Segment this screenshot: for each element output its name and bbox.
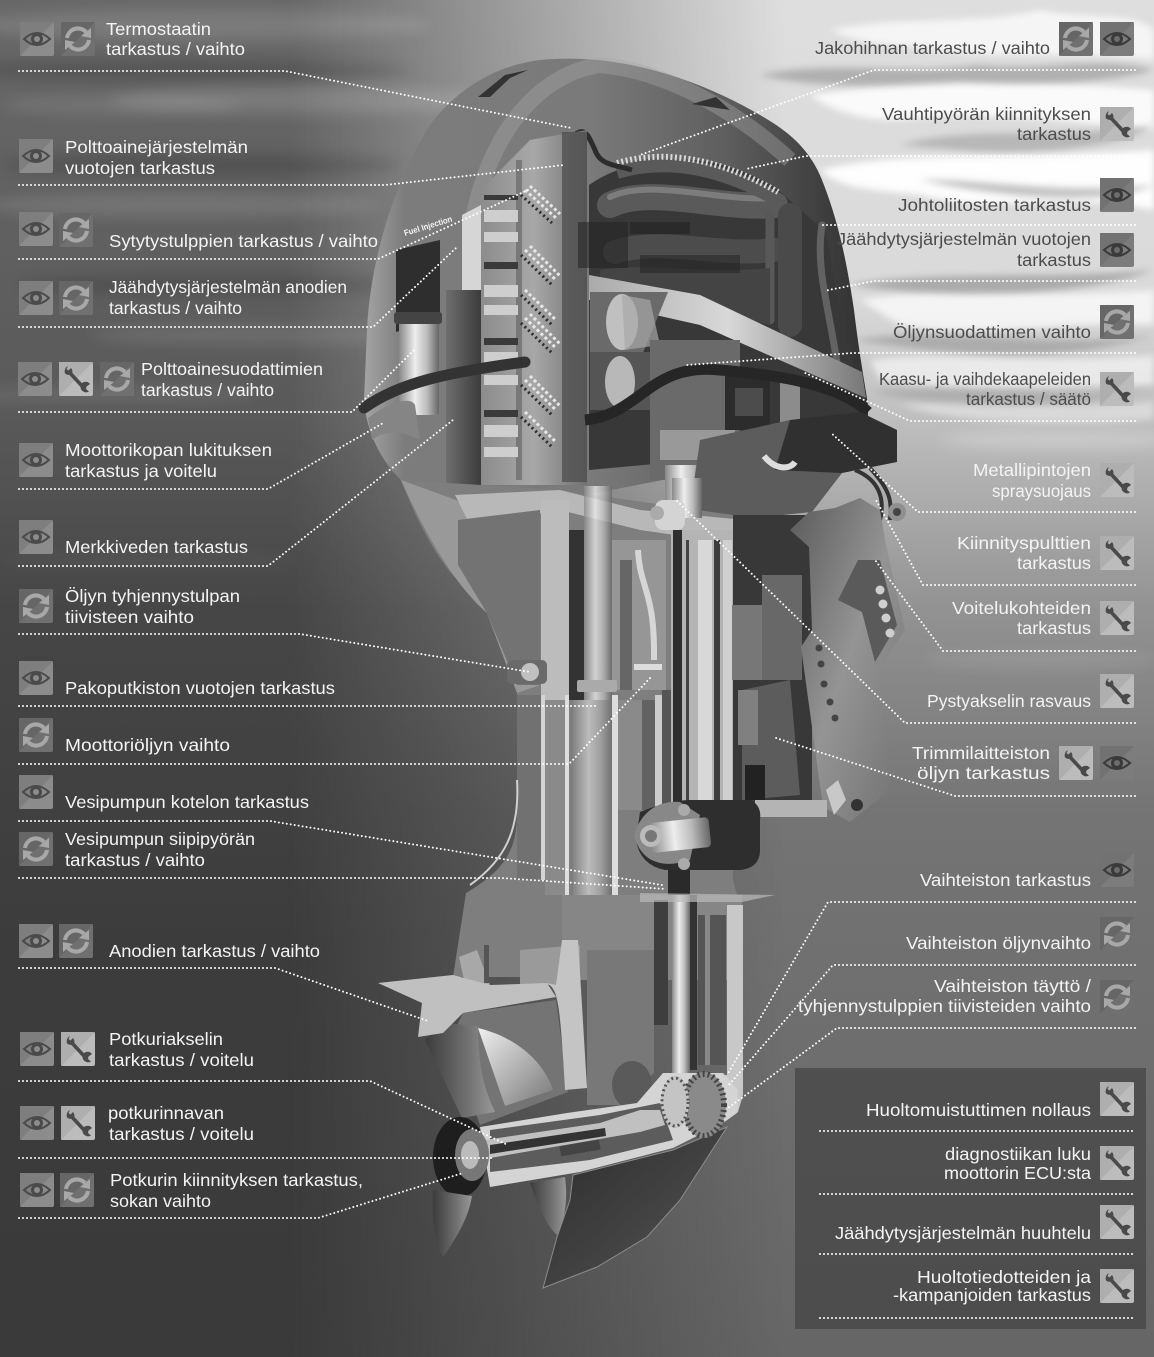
label text: Polttoainesuodattimien — [141, 359, 323, 379]
label text — [882, 104, 1091, 144]
label text: Termostaatin — [106, 19, 211, 39]
leader line — [727, 965, 1135, 1087]
label text — [957, 533, 1091, 573]
icon: refresh — [100, 362, 134, 396]
left item: Anodien — [19, 924, 428, 1021]
exhaust cavity — [612, 1061, 652, 1109]
label text: Anodien tarkastus / vaihto — [109, 941, 320, 961]
leader line — [19, 420, 453, 566]
right item: Jäähdytysjärjestelmän vuotojen — [824, 229, 1135, 291]
label text: Moottorikopan lukituksen — [65, 440, 272, 460]
leader line — [876, 500, 1135, 585]
label text: Potkurin kiinnityksen tarkastus, — [110, 1170, 363, 1190]
prop tunnel area — [450, 1000, 568, 1125]
left item: Sytytystulppien — [19, 190, 528, 259]
icon: wrench — [1100, 1146, 1134, 1180]
icon: wrench — [61, 1032, 95, 1066]
divider line — [820, 1193, 1135, 1195]
leader line — [830, 432, 1135, 512]
lower housing fill — [562, 895, 742, 980]
label text: Trimmilaitteiston — [912, 743, 1050, 763]
leader line — [640, 70, 1135, 155]
label text: Jäähdytysjärjestelmän anodien — [109, 277, 347, 297]
waterline flange — [640, 893, 775, 902]
label text: Metallipintojen — [973, 460, 1091, 480]
leader line — [746, 156, 1135, 169]
intake manifold tubes — [610, 190, 838, 370]
leader line — [19, 71, 571, 128]
icon: eye — [19, 520, 53, 554]
right item: Kaasu- ja vaihdekaapeleiden — [803, 369, 1135, 421]
icon: wrench — [1100, 1205, 1134, 1239]
leader line — [19, 705, 598, 707]
label text: Vesipumpun kotelon tarkastus — [65, 792, 309, 812]
icon: eye — [1100, 178, 1134, 212]
right item: Öljynsuodattimen — [687, 305, 1135, 365]
plate bolt structure — [459, 945, 580, 985]
leader line — [676, 500, 1135, 723]
left item: Merkkiveden — [19, 420, 453, 566]
label text: Pystyakselin rasvaus — [927, 691, 1091, 711]
propeller hub — [433, 1117, 489, 1197]
left cowl panel and fuel filter — [394, 205, 481, 485]
label text: potkurinnavan — [108, 1103, 224, 1123]
label text — [912, 743, 1050, 783]
label text: moottorin ECU:sta — [944, 1163, 1091, 1183]
right item: Trimmilaitteiston — [776, 738, 1135, 796]
icon: eye — [20, 22, 54, 56]
leader line — [19, 677, 651, 764]
icon: eye — [19, 281, 53, 315]
lower black cowl — [775, 412, 897, 473]
label text: tarkastus — [1017, 124, 1091, 144]
label text: Vaihteiston täyttö / — [934, 976, 1091, 996]
label text: tarkastus / säätö — [966, 389, 1091, 409]
label text: Potkuriakselin — [109, 1029, 223, 1049]
label text: tarkastus / voitelu — [109, 1050, 254, 1070]
flywheel ring gear — [617, 157, 778, 200]
label text: Kaasu- ja vaihdekaapeleiden — [879, 369, 1091, 389]
divider line — [820, 1253, 1135, 1255]
icon: eye — [1100, 22, 1134, 56]
label text — [65, 137, 248, 178]
label text: spraysuojaus — [992, 481, 1091, 501]
cam column — [516, 132, 587, 482]
lower left cowl latch — [368, 401, 420, 440]
left item: Jäähdytysjärjestelmän anodien — [19, 248, 456, 327]
pistons — [590, 292, 668, 410]
skeg — [543, 1127, 727, 1288]
icon: refresh — [59, 924, 93, 958]
label text — [944, 1144, 1091, 1183]
label text: tarkastus ja voitelu — [65, 461, 217, 481]
icon: wrench — [1100, 536, 1134, 570]
label text — [893, 1267, 1091, 1305]
label text: Öljyn tyhjennystulpan — [65, 586, 240, 606]
cowl label text: Fuel Injection — [403, 214, 453, 238]
leader line — [875, 560, 1135, 651]
lower propeller blade — [433, 1190, 472, 1257]
adjustment holes — [816, 586, 894, 722]
label text: Öljynsuodattimen vaihto — [893, 322, 1091, 342]
cylinder head column — [481, 130, 587, 485]
left item: Potkurin kiinnityksen — [19, 1170, 463, 1218]
label text — [65, 586, 240, 627]
label text — [798, 976, 1091, 1016]
icon: refresh — [1059, 22, 1093, 56]
right item: Vaihteiston tarkastus — [727, 853, 1135, 1075]
label text: Pakoputkiston vuotojen tarkastus — [65, 678, 335, 698]
leader line — [19, 1081, 508, 1145]
right item: Voitelukohteiden — [875, 560, 1135, 651]
label text: -kampanjoiden tarkastus — [893, 1285, 1091, 1305]
label text: Vesipumpun siipipyörän — [65, 829, 255, 849]
right item: Metallipintojen — [830, 432, 1135, 512]
outboard motor illustration — [364, 59, 906, 1288]
fuel hose — [585, 369, 868, 420]
left item: Moottoriöljyn — [19, 677, 651, 764]
lower shell left curve — [470, 780, 517, 885]
right item: Vaihteiston öljynvaihto — [727, 917, 1135, 1087]
label text: Huoltomuistuttimen nollaus — [866, 1100, 1091, 1120]
right item: Pystyakselin — [676, 500, 1135, 723]
left item: Termostaatin — [19, 19, 571, 128]
left item: Polttoainesuodattimien — [18, 350, 414, 412]
label text: diagnostiikan luku — [945, 1144, 1091, 1164]
panel item: Huoltotiedotteiden — [820, 1267, 1135, 1318]
left item: Pakoputkiston — [19, 661, 598, 706]
label text — [110, 1170, 363, 1211]
icon: wrench — [1100, 674, 1134, 708]
icon: wrench — [1100, 463, 1134, 497]
label text: Jäähdytysjärjestelmän huuhtelu — [835, 1223, 1091, 1243]
icon: eye — [1100, 746, 1134, 780]
leader line — [819, 224, 1135, 226]
label text: Vauhtipyörän kiinnityksen — [882, 104, 1091, 124]
icon: wrench — [59, 362, 93, 396]
bevel gears — [661, 1072, 726, 1138]
drain plug — [507, 660, 547, 684]
bracket dark recess — [838, 560, 897, 662]
swivel bolts — [826, 503, 906, 815]
label text: tarkastus — [1017, 618, 1091, 638]
label text — [108, 1103, 254, 1144]
translucent cowl arch — [470, 65, 790, 240]
lower mount arm — [755, 800, 827, 817]
label text — [109, 1029, 254, 1070]
icon: wrench — [1100, 372, 1134, 406]
upper walls — [458, 486, 666, 700]
dark interior behind bracket — [733, 515, 812, 805]
leader line — [687, 353, 1135, 365]
icon: refresh — [19, 832, 53, 866]
leader line — [803, 372, 1135, 421]
label text — [106, 19, 245, 59]
anti-ventilation plate — [378, 975, 556, 1037]
leader line — [19, 1173, 463, 1218]
leader line — [19, 422, 385, 489]
icon: refresh — [59, 213, 93, 247]
icon: eye — [19, 212, 53, 246]
label text: tarkastus / vaihto — [109, 298, 242, 318]
label text — [141, 359, 323, 400]
icon: eye — [19, 661, 53, 695]
thermostat hose — [572, 132, 632, 170]
propeller shaft — [485, 1110, 665, 1158]
leader line — [19, 1157, 495, 1159]
leader line — [19, 968, 428, 1021]
label text — [973, 460, 1091, 501]
label text — [879, 369, 1091, 409]
manifold lower block — [600, 267, 770, 325]
cowling shell — [364, 59, 868, 500]
left cowl lower skirt — [401, 480, 540, 693]
panel item: Jäähdytysjärjestelmän huuhtelu — [820, 1205, 1135, 1254]
icon: eye — [1100, 233, 1134, 267]
label text: Jäähdytysjärjestelmän vuotojen — [837, 229, 1091, 249]
exhaust housing rear — [587, 950, 654, 1105]
label text — [65, 829, 255, 870]
icon: refresh — [59, 281, 93, 315]
leader line — [19, 190, 528, 259]
upper steering shaft cap — [650, 478, 702, 530]
label text: tyhjennystulppien tiivisteiden vaihto — [798, 996, 1091, 1016]
exhaust wall — [547, 940, 587, 1090]
crankcase and throttle parts — [650, 340, 800, 520]
left item: Vesipumpun siipipyörän — [19, 829, 666, 889]
label text: Kiinnityspulttien — [957, 533, 1091, 553]
vertical rods — [671, 530, 737, 805]
label text: sokan vaihto — [110, 1191, 211, 1211]
icon: wrench — [1100, 107, 1134, 141]
icon: refresh — [19, 718, 53, 752]
valve springs — [525, 186, 560, 442]
label text: tarkastus — [1017, 250, 1091, 270]
icon: eye — [19, 443, 53, 477]
icon: eye — [18, 362, 52, 396]
top plate — [455, 490, 745, 545]
label text — [837, 229, 1091, 270]
leader line — [19, 248, 456, 327]
cylinder blocks — [484, 210, 518, 457]
divider line — [820, 1317, 1135, 1319]
left item: Vesipumpun kotelon — [19, 775, 662, 885]
label text: tarkastus / vaihto — [65, 850, 205, 870]
right item: Jakohihnan — [640, 22, 1135, 155]
transom bracket — [790, 498, 905, 822]
gearcase torpedo — [480, 1073, 738, 1187]
label text: öljyn tarkastus — [917, 763, 1050, 783]
label text: Johtoliitosten tarkastus — [898, 195, 1091, 215]
upper propeller blade — [425, 1023, 495, 1118]
label text — [952, 598, 1091, 638]
light prop blade — [478, 1028, 553, 1106]
lower mount — [634, 800, 760, 870]
icon: eye — [19, 924, 53, 958]
service panel — [795, 1068, 1146, 1329]
label text: vuotojen tarkastus — [65, 158, 215, 178]
right item: Vauhtipyörän — [746, 104, 1135, 169]
cowl vents — [478, 70, 730, 110]
propeller shaft cavity — [490, 1103, 673, 1172]
icon: wrench — [1100, 601, 1134, 635]
right item: Vaihteiston täyttö — [728, 976, 1135, 1108]
left item: Öljyn tyhjennystulpan — [19, 586, 530, 672]
label text: tarkastus / voitelu — [109, 1124, 254, 1144]
left item: Potkuriakselin — [19, 1029, 508, 1145]
icon: refresh — [60, 1173, 94, 1207]
icon: wrench — [1059, 746, 1093, 780]
leader line — [824, 281, 1135, 291]
label text: tarkastus / vaihto — [106, 39, 245, 59]
label text: Polttoainejärjestelmän — [65, 137, 248, 157]
diagonal light band — [589, 275, 866, 398]
label text: tarkastus — [1017, 553, 1091, 573]
leader line — [19, 821, 662, 885]
leader line — [19, 634, 530, 672]
leader line — [19, 350, 414, 412]
label text: Moottoriöljyn vaihto — [65, 735, 230, 755]
cowl strap — [364, 362, 525, 408]
icon: refresh — [1100, 917, 1134, 951]
midsection body — [401, 480, 743, 977]
icon: refresh — [1100, 305, 1134, 339]
engine interior, dark — [589, 159, 866, 470]
leader line — [19, 878, 666, 889]
label text — [65, 440, 272, 481]
label text: Jakohihnan tarkastus / vaihto — [815, 38, 1050, 58]
label text: Vaihteiston tarkastus — [920, 870, 1091, 890]
left item: Moottorikopan lukituksen — [19, 422, 385, 489]
label text: tarkastus / vaihto — [141, 380, 274, 400]
icon: eye — [19, 775, 53, 809]
leader line — [19, 165, 564, 185]
under-cowl grey — [690, 420, 842, 520]
label text: Voitelukohteiden — [952, 598, 1091, 618]
right item: Kiinnityspulttien — [876, 500, 1135, 585]
lower walls — [517, 690, 671, 905]
dark noisy engine centre — [578, 222, 740, 273]
label text: Huoltotiedotteiden ja — [917, 1267, 1091, 1287]
icon: wrench — [61, 1106, 95, 1140]
leader line — [728, 1028, 1135, 1108]
icon: refresh — [1100, 980, 1134, 1014]
icon: wrench — [1100, 1082, 1134, 1116]
icon: eye — [20, 1106, 54, 1140]
interior cylinders — [732, 575, 802, 800]
right housing shell — [724, 905, 743, 1120]
leader line — [727, 902, 1135, 1075]
icon: eye — [20, 1173, 54, 1207]
icon: refresh — [61, 22, 95, 56]
icon: eye — [19, 139, 53, 173]
icon: eye — [20, 1032, 54, 1066]
water pump and drive shaft — [654, 870, 726, 1075]
label text — [109, 277, 347, 318]
steering hoses and fitting — [764, 456, 891, 520]
label text: tiivisteen vaihto — [65, 607, 194, 627]
right item: Johtoliitosten — [819, 178, 1135, 225]
left item: Polttoainejärjestelmän — [19, 137, 564, 185]
icon: eye — [1100, 853, 1134, 887]
panel item: Huoltomuistuttimen — [820, 1082, 1135, 1131]
label text: Vaihteiston öljynvaihto — [906, 933, 1091, 953]
divider line — [820, 1130, 1135, 1132]
second lower propeller blade — [530, 1177, 566, 1235]
icon: refresh — [19, 589, 53, 623]
left item: potkurinnavan — [19, 1103, 495, 1158]
label text: Sytytystulppien tarkastus / vaihto — [109, 231, 378, 251]
label text: Merkkiveden tarkastus — [65, 537, 248, 557]
leader line — [776, 738, 1135, 796]
panel item: diagnostiikan — [820, 1144, 1135, 1194]
icon: wrench — [1100, 1269, 1134, 1303]
